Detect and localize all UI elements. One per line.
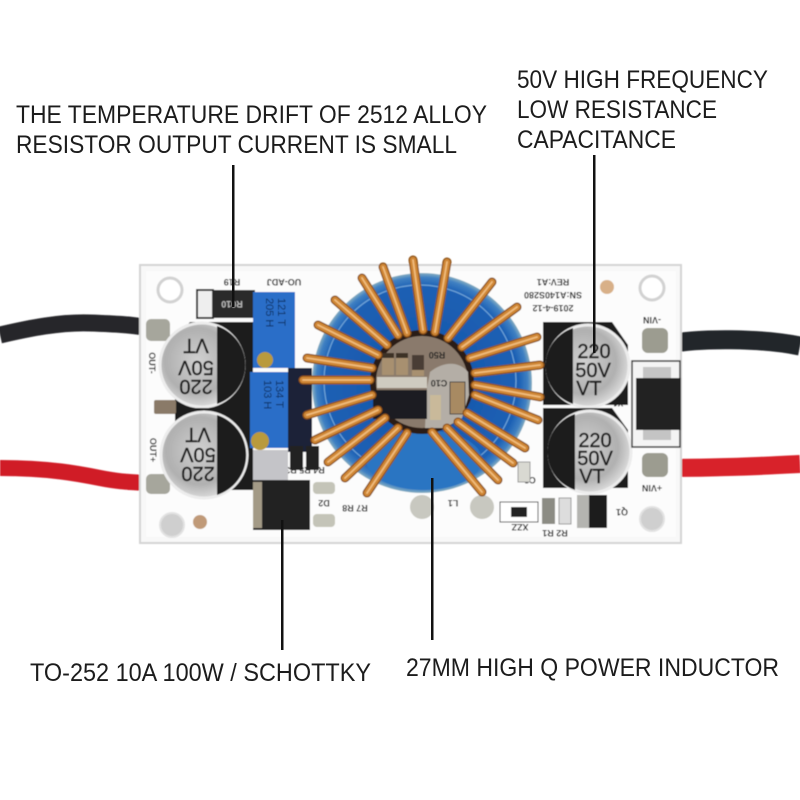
capacitor: left bottom 220 50V: 50V bbox=[180, 443, 216, 465]
silk labels: R7 R8 bbox=[342, 503, 368, 513]
silk labels: -VIN bbox=[643, 315, 661, 325]
silk labels: L1 bbox=[448, 498, 458, 508]
wire: left black output lead bbox=[0, 323, 145, 335]
callout line: capacitance bbox=[593, 155, 596, 353]
trimmer potentiometer: bottom blue: 103 H bbox=[261, 380, 273, 409]
trimmer potentiometer: bottom blue: 134 T bbox=[273, 380, 285, 408]
capacitor: left bottom 220 50V: VT bbox=[185, 423, 211, 445]
wire: left red output lead bbox=[0, 468, 147, 483]
label: schottky: TO-252 10A 100W / SCHOTTKY bbox=[30, 659, 371, 687]
capacitor: right bottom 220 50V: VT bbox=[579, 466, 605, 488]
pcb inside toroid: IC and parts bbox=[370, 330, 474, 434]
silk labels: REV:A1 bbox=[537, 277, 569, 287]
pcb inside toroid: IC and parts: R50 bbox=[429, 350, 445, 360]
label: 50V high frequency capacitance bbox=[517, 66, 768, 154]
silk labels: 2019-4-12 bbox=[532, 303, 574, 313]
label: power inductor: 27MM HIGH Q POWER INDUCTOR bbox=[406, 654, 779, 682]
pcb: white board bbox=[140, 265, 681, 543]
inductor: blue toroid core bbox=[312, 273, 532, 493]
silk labels: C3 bbox=[524, 475, 536, 485]
wire: right black input lead bbox=[668, 340, 800, 346]
input diode on right bbox=[632, 361, 681, 447]
capacitor: left bottom 220 50V bbox=[161, 408, 253, 498]
silk labels: OUT+ bbox=[148, 438, 158, 462]
schottky diode: TO-252 bbox=[253, 480, 335, 530]
resistor: R010 alloy: R010 bbox=[221, 299, 243, 309]
silk labels: R19 bbox=[224, 277, 240, 287]
callout line: alloy resistor bbox=[232, 165, 234, 307]
label: temperature drift of alloy resistor: THE TEMPERATURE DRIFT OF 2512 ALLOY bbox=[16, 101, 487, 129]
silk labels: X1 bbox=[612, 398, 624, 408]
silk labels: Q1 bbox=[616, 507, 628, 517]
dark parts between trimmers and coil bbox=[154, 368, 319, 470]
silver pad under trimmers bbox=[253, 450, 288, 480]
silk labels bbox=[147, 277, 662, 538]
silk labels: +VIN bbox=[642, 483, 662, 493]
silk labels: D2 bbox=[318, 498, 330, 508]
capacitor: left bottom 220 50V: 220 bbox=[181, 462, 215, 484]
mounting holes and pads bbox=[158, 276, 664, 537]
trimmer potentiometer: top blue: 205 H bbox=[263, 298, 275, 327]
trimmer potentiometer: top blue: 121 T bbox=[275, 298, 287, 326]
capacitor: left top 220 50V: VT bbox=[183, 334, 209, 356]
capacitor: left top 220 50V: 50V bbox=[178, 356, 214, 378]
wire: right red input lead bbox=[664, 464, 800, 468]
resistor: R010 alloy bbox=[197, 290, 255, 318]
silk labels: R4 R5 R3 bbox=[285, 465, 325, 475]
inductor leg pads bbox=[410, 495, 494, 519]
capacitor: left top 220 50V: 220 bbox=[179, 375, 213, 397]
photo: boost converter circuit board bbox=[0, 260, 800, 543]
capacitor: right top 220 50V: 220 bbox=[577, 341, 611, 363]
transistor Q1 and small parts lower right bbox=[500, 462, 607, 528]
label: temperature drift of alloy resistor: RESISTOR OUTPUT CURRENT IS SMALL bbox=[16, 131, 457, 159]
capacitor: right top 220 50V bbox=[543, 322, 629, 407]
capacitor: right bottom 220 50V bbox=[543, 408, 631, 493]
silk labels: OUT- bbox=[147, 352, 157, 374]
capacitor: left top 220 50V bbox=[160, 322, 253, 408]
capacitor: right top 220 50V: VT bbox=[576, 378, 602, 400]
callout line: inductor bbox=[431, 478, 434, 640]
capacitor: right bottom 220 50V: 220 bbox=[578, 430, 612, 452]
silk labels: R2 R1 bbox=[542, 528, 568, 538]
label: temperature drift of alloy resistor bbox=[16, 101, 487, 159]
capacitor: right bottom 220 50V: 50V bbox=[577, 448, 613, 470]
silk labels: XZZ bbox=[511, 522, 528, 532]
silk labels: SN:A140S280 bbox=[524, 290, 582, 300]
pcb inside toroid: IC and parts: C10 bbox=[431, 378, 447, 388]
label: 50V high frequency capacitance: 50V HIGH FREQUENCY bbox=[517, 66, 768, 94]
silk labels: UO-ADJ bbox=[267, 277, 301, 287]
label: 50V high frequency capacitance: CAPACITANCE bbox=[517, 126, 676, 154]
trimmer potentiometer: top blue bbox=[253, 292, 295, 368]
inductor: copper windings bbox=[303, 260, 540, 493]
label: 50V high frequency capacitance: LOW RESISTANCE bbox=[517, 96, 717, 124]
trimmer potentiometer: bottom blue bbox=[250, 372, 288, 450]
capacitor: right top 220 50V: 50V bbox=[575, 360, 611, 382]
solder joints for wires bbox=[146, 319, 668, 494]
callout line: schottky bbox=[281, 520, 284, 650]
